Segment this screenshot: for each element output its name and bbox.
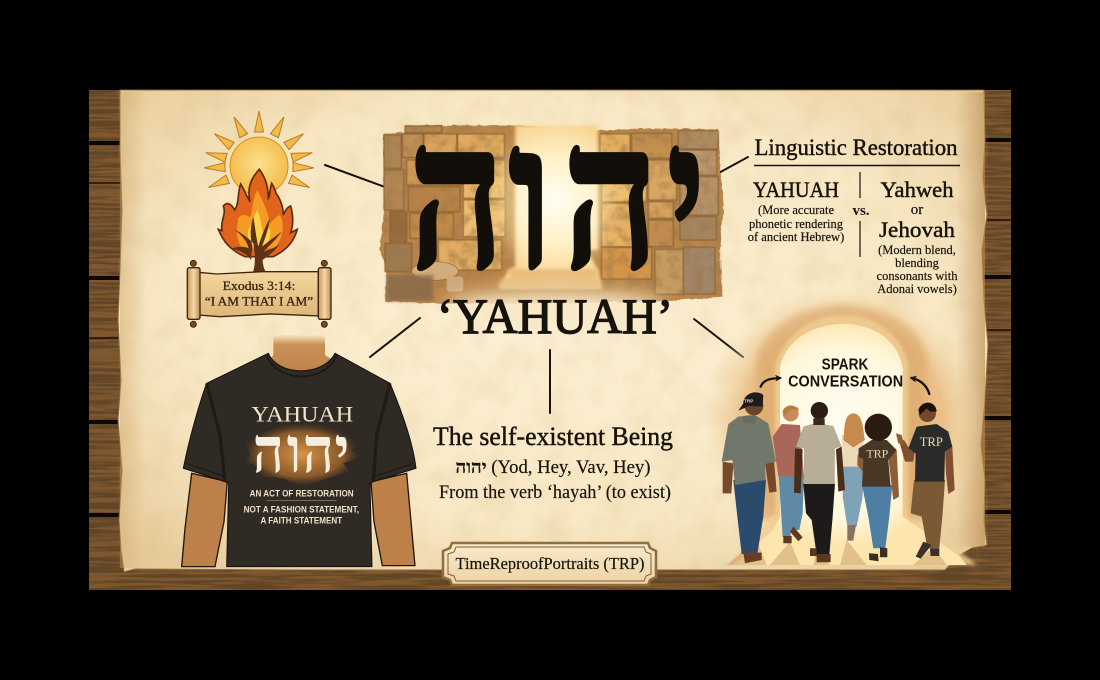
icon: burning bush [218, 169, 297, 273]
badge: TimeReproofPortraits (TRP) [443, 543, 656, 585]
shirt graphic [242, 402, 362, 525]
person: hat and grey shirt [722, 392, 777, 563]
scroll: Exodus 3:14: “I AM THAT I AM” [205, 295, 313, 309]
panel: linguistic restoration [748, 135, 960, 296]
heading: Linguistic Restoration [754, 135, 958, 160]
connector lines [325, 157, 748, 413]
parchment sheet [118, 90, 988, 572]
stone wall image [380, 86, 724, 322]
YAHUAH column: phonetic rendering [749, 217, 844, 231]
person: brown TRP shirt: TRP [866, 446, 889, 460]
scroll: Exodus 3:14 [187, 260, 331, 327]
spark conversation label [788, 356, 903, 390]
panel: self-existent being: From the verb ‘hayah’ (to exist) [439, 483, 671, 503]
title: YAHUAH: ‘YAHUAH’ [437, 288, 673, 344]
YAHUAH column: YAHUAH [753, 177, 839, 202]
person: dark TRP shirt [896, 403, 955, 559]
Yahweh or Jehovah column: Adonai vowels) [877, 282, 957, 296]
t-shirt illustration [182, 335, 416, 567]
spark conversation label: CONVERSATION [788, 373, 903, 390]
panel: self-existent being: יהוה (Yod, Hey, Vav, Hey) [456, 458, 650, 478]
Hebrew letters: ו [509, 86, 553, 311]
person: hat and grey shirt: TRP [744, 399, 753, 404]
Yahweh or Jehovah column: blending [895, 256, 940, 270]
YAHUAH column: of ancient Hebrew) [748, 230, 844, 244]
person: red shirt [773, 405, 804, 543]
Hebrew name on stone wall [380, 86, 724, 322]
doorway glow [498, 130, 612, 270]
YAHUAH column: (More accurate [758, 203, 834, 217]
archway [703, 287, 983, 565]
scroll: Exodus 3:14: Exodus 3:14: [223, 279, 295, 293]
arms and neck [182, 335, 415, 567]
person: blonde woman [842, 413, 865, 541]
Hebrew letters: ה [563, 86, 659, 311]
spark conversation label: SPARK [822, 356, 868, 373]
Hebrew letters: ה [409, 86, 505, 311]
icon: sun [204, 111, 314, 195]
shirt graphic: ה [303, 416, 334, 486]
shirt graphic: YAHUAH [251, 402, 353, 427]
shirt [183, 353, 416, 567]
person: brown TRP shirt [857, 414, 899, 561]
Hebrew letters: י [667, 86, 705, 311]
shirt graphic: A FAITH STATEMENT [260, 515, 343, 525]
panel: self-existent being [433, 422, 673, 503]
vs: vs. [852, 203, 870, 219]
curved arrows [761, 378, 929, 394]
Yahweh or Jehovah column [877, 177, 958, 296]
Yahweh or Jehovah column: Yahweh [880, 177, 954, 202]
YAHUAH column [748, 177, 844, 244]
shirt graphic: NOT A FASHION STATEMENT, [244, 505, 359, 515]
Yahweh or Jehovah column: or [911, 202, 923, 218]
shirt graphic: ו [287, 416, 301, 487]
badge: TimeReproofPortraits (TRP): TimeReproofPortraits (TRP) [456, 554, 644, 573]
Yahweh or Jehovah column: (Modern blend, [878, 243, 956, 257]
shirt graphic: AN ACT OF RESTORATION [250, 488, 354, 498]
Yahweh or Jehovah column: Jehovah [879, 217, 955, 242]
person: dark TRP shirt: TRP [920, 435, 943, 449]
wooden frame [89, 90, 1011, 590]
Hebrew letters [409, 86, 705, 311]
shirt graphic: י [335, 416, 349, 487]
panel: self-existent being: The self-existent Being [433, 422, 673, 451]
Yahweh or Jehovah column: consonants with [877, 269, 958, 283]
group walking through archway [703, 287, 983, 565]
shirt graphic: ה [253, 416, 284, 486]
person: beige shirt [794, 402, 845, 562]
